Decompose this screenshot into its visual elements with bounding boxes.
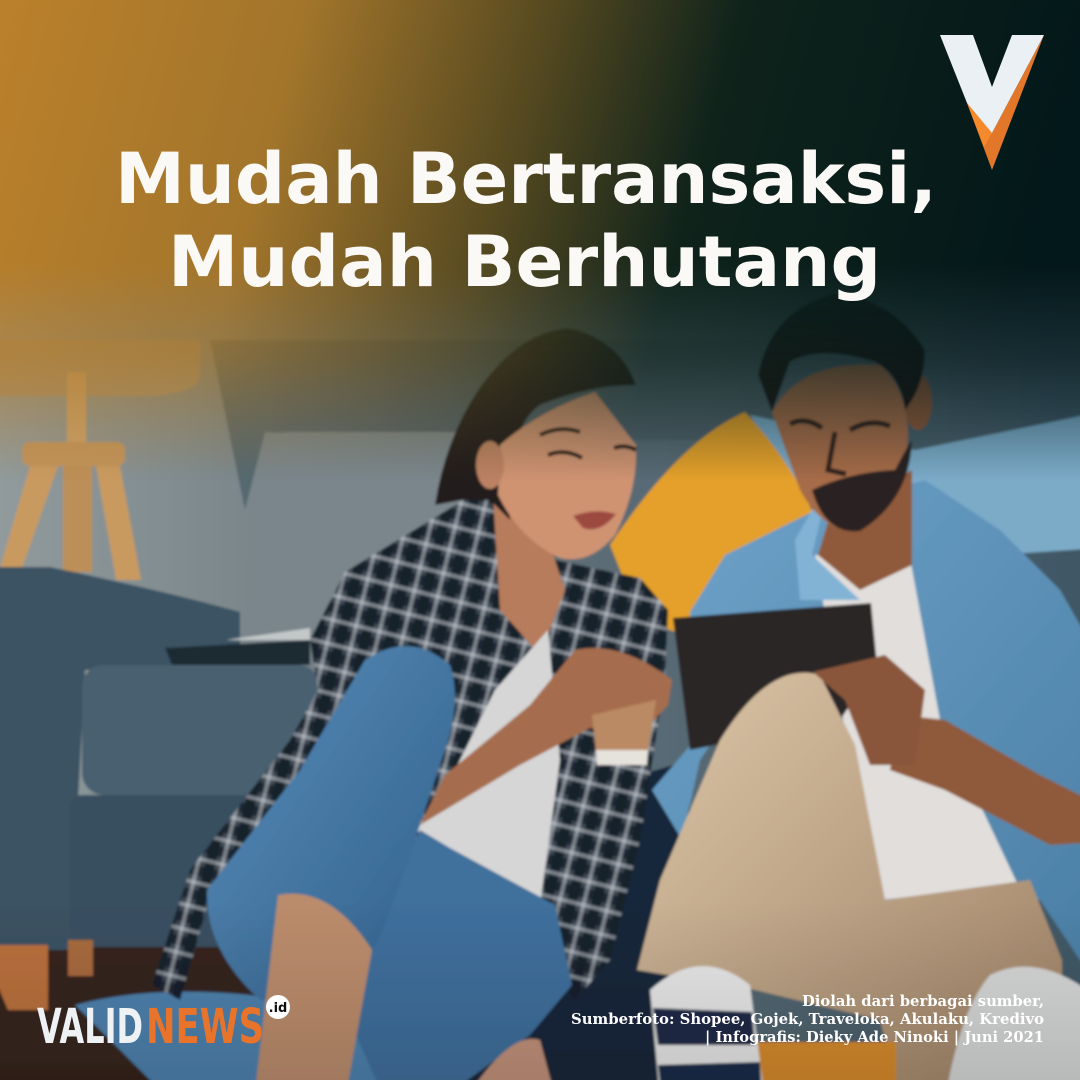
source credits: Sumberfoto: Shopee, Gojek, Traveloka, Akulaku, Kredivo <box>571 1010 1044 1028</box>
bottom-left logo: VALIDNEWS.id <box>37 995 290 1055</box>
top colour gradient overlay <box>0 0 1080 480</box>
tablet <box>673 603 877 750</box>
man ear <box>904 374 932 430</box>
coffee cup <box>592 700 656 765</box>
man beige trousers <box>637 673 1062 1080</box>
woman arm and hand <box>420 648 672 825</box>
source credits: Diolah dari berbagai sumber, <box>802 992 1044 1010</box>
striped sock <box>650 966 765 1080</box>
man neck <box>818 470 912 590</box>
woman ear <box>476 441 504 489</box>
bottom shading <box>0 900 1080 1080</box>
source credits: | Infografis: Dieky Ade Ninoki | Juni 2021 <box>705 1028 1044 1046</box>
woman bare foot <box>465 1039 556 1080</box>
title <box>115 138 937 303</box>
woman eyes and brows <box>540 429 636 458</box>
blue pillow behind man <box>750 412 1080 560</box>
title: Mudah Bertransaksi, <box>115 138 937 220</box>
woman plaid shirt <box>152 490 668 1000</box>
woman bare shin <box>254 894 372 1080</box>
man eyes and nose <box>790 421 890 474</box>
floor lamp <box>0 340 200 580</box>
woman jeans leg <box>207 646 455 1000</box>
top-right V logo <box>940 35 1044 170</box>
man <box>637 293 1080 1080</box>
floor <box>0 945 300 1080</box>
dark area between the couple <box>400 760 690 1080</box>
man shirt collar <box>795 500 860 600</box>
man hair <box>758 293 925 412</box>
title: Mudah Berhutang <box>168 221 881 303</box>
woman face <box>498 392 636 559</box>
woman smile <box>573 511 616 529</box>
woman <box>152 328 672 1080</box>
woman neck <box>492 480 565 655</box>
man hand holding tablet <box>813 655 925 765</box>
bottom-left logo: VALIDNEWS.id: VALID <box>37 999 143 1055</box>
woman white tee <box>415 630 560 905</box>
man forearm <box>890 715 1080 845</box>
woman jeans lower leg <box>340 830 572 1080</box>
woman ponytail and hair <box>435 328 636 520</box>
bottom-left logo: VALIDNEWS.id: NEWS <box>146 999 264 1055</box>
orange cloth near floor <box>740 1042 896 1080</box>
man white tee <box>815 555 1018 900</box>
man face <box>772 365 908 530</box>
source credits <box>571 992 1044 1046</box>
sofa <box>0 432 470 1010</box>
man beard <box>812 440 912 531</box>
man blue shirt <box>652 480 1080 990</box>
.id badge <box>266 995 290 1019</box>
wall shadow <box>210 340 780 510</box>
yellow pillow <box>610 412 814 640</box>
.id badge: .id <box>269 1001 287 1016</box>
man white sock foot <box>945 967 1080 1080</box>
floor cushion <box>75 992 410 1080</box>
